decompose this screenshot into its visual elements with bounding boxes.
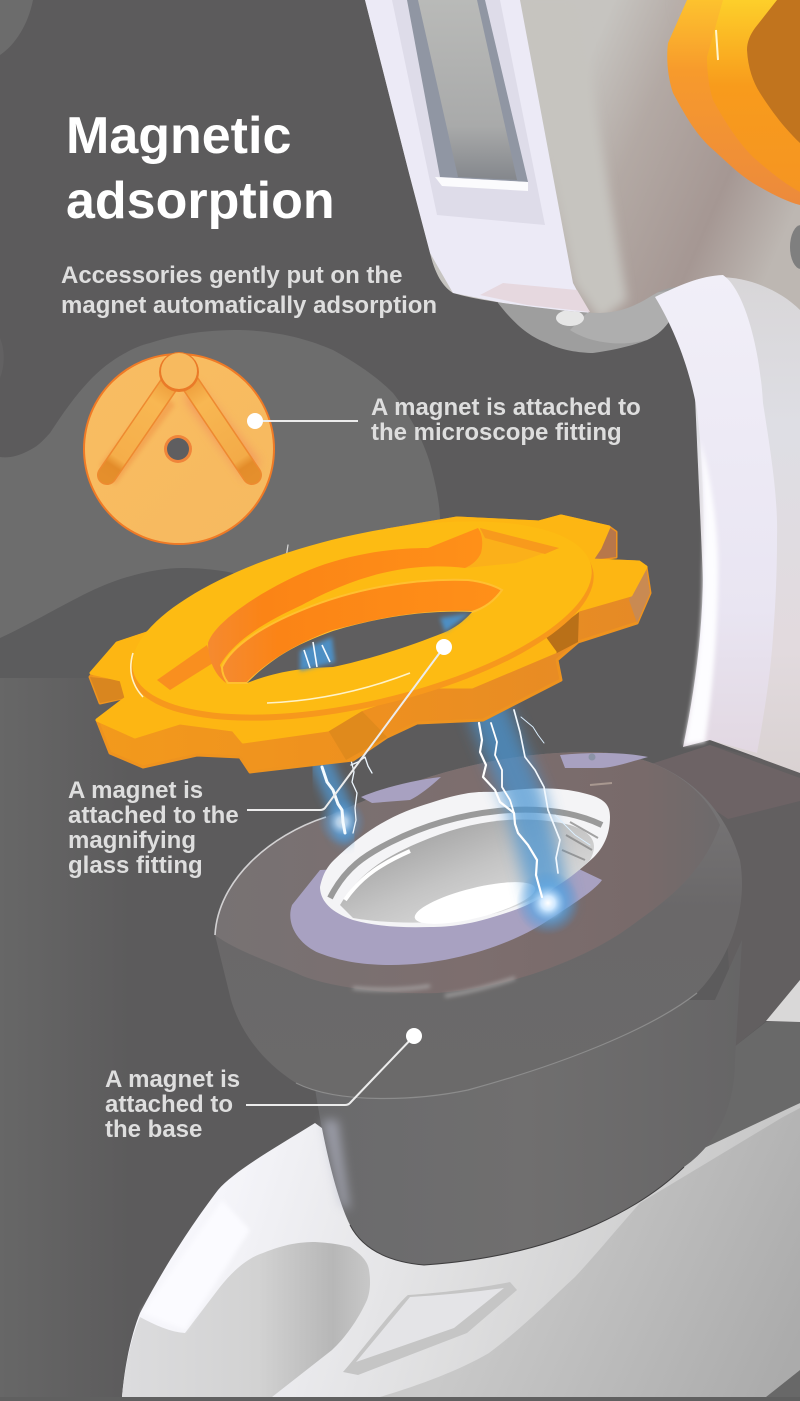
disc left arm xyxy=(107,383,170,475)
gear centre opening xyxy=(247,612,472,683)
leader line: base callout xyxy=(246,1028,422,1105)
upper inner wall xyxy=(208,528,482,683)
head window glass xyxy=(407,0,528,191)
callout: microscope fitting: the microscope fitting xyxy=(371,419,622,446)
callout: base: A magnet is xyxy=(105,1066,240,1093)
orange eyepiece ring xyxy=(667,0,800,205)
callout: magnifying glass fitting: glass fitting xyxy=(68,852,203,879)
gear side wall xyxy=(90,516,650,772)
microscope head xyxy=(360,0,800,340)
base cylinder xyxy=(311,940,742,1265)
callout: microscope fitting: A magnet is attached to xyxy=(371,394,641,421)
callout: base: the base xyxy=(105,1116,202,1143)
foot diamond button xyxy=(343,1282,517,1375)
title: Magnetic xyxy=(66,107,291,165)
subtitle: Accessories gently put on the xyxy=(61,262,402,289)
head window frame xyxy=(392,0,545,225)
microscope arm xyxy=(655,275,800,773)
subtitle: magnet automatically adsorption xyxy=(61,292,437,319)
collar highlight xyxy=(215,817,326,935)
leader line: disc callout xyxy=(247,413,358,429)
lavender surface patches xyxy=(290,753,648,965)
base foot xyxy=(122,1103,800,1397)
title: adsorption xyxy=(66,172,335,230)
callout: magnifying glass fitting: attached to the xyxy=(68,802,239,829)
lightning: right bolts xyxy=(479,710,590,935)
disc knob xyxy=(159,352,199,392)
bolts seen through opening xyxy=(300,613,470,671)
dark block behind the base xyxy=(648,745,800,1150)
callout: magnifying glass fitting: A magnet is xyxy=(68,777,203,804)
gear top face xyxy=(91,516,646,742)
orange gear ring xyxy=(90,484,650,772)
disc centre hole xyxy=(164,435,192,463)
lightning: left bolts xyxy=(286,545,372,846)
leader line: gear callout xyxy=(247,639,452,810)
callout: base: attached to xyxy=(105,1091,233,1118)
microscope underside lens mount xyxy=(498,280,680,353)
ring left cut xyxy=(157,645,213,690)
base collar xyxy=(215,752,742,1099)
lower inner wall xyxy=(222,580,502,683)
callout: magnifying glass fitting: magnifying xyxy=(68,827,196,854)
disc right arm xyxy=(190,383,252,475)
ring top notch xyxy=(465,528,559,568)
raised ring xyxy=(112,488,612,758)
collar opening xyxy=(320,783,612,933)
magnet disc xyxy=(83,352,275,545)
